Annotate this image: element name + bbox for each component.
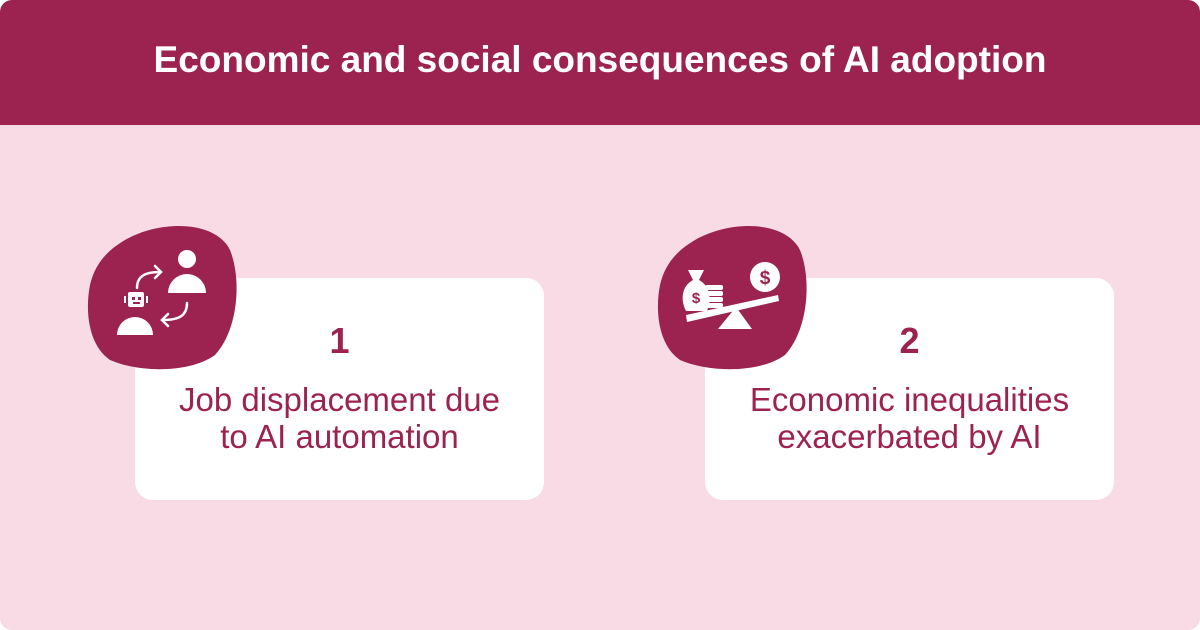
icon: economic inequality: $ [692, 290, 701, 307]
card 2 [705, 278, 1114, 500]
number 1: 1 [329, 320, 350, 361]
number 2: 2 [899, 320, 920, 361]
icon: job displacement [88, 226, 237, 370]
title: Economic and social consequences of AI adoption [154, 39, 1046, 80]
text 2: Economic inequalities [750, 381, 1069, 418]
text 1: to AI automation [220, 418, 459, 455]
icon: economic inequality: $ [760, 268, 771, 289]
text 1: Job displacement due [179, 381, 500, 418]
header band [0, 0, 1200, 125]
text 1 [179, 381, 500, 455]
text 2: exacerbated by AI [777, 418, 1042, 455]
card 1 [135, 278, 544, 500]
icon: economic inequality [658, 226, 807, 370]
text 2 [750, 381, 1069, 455]
